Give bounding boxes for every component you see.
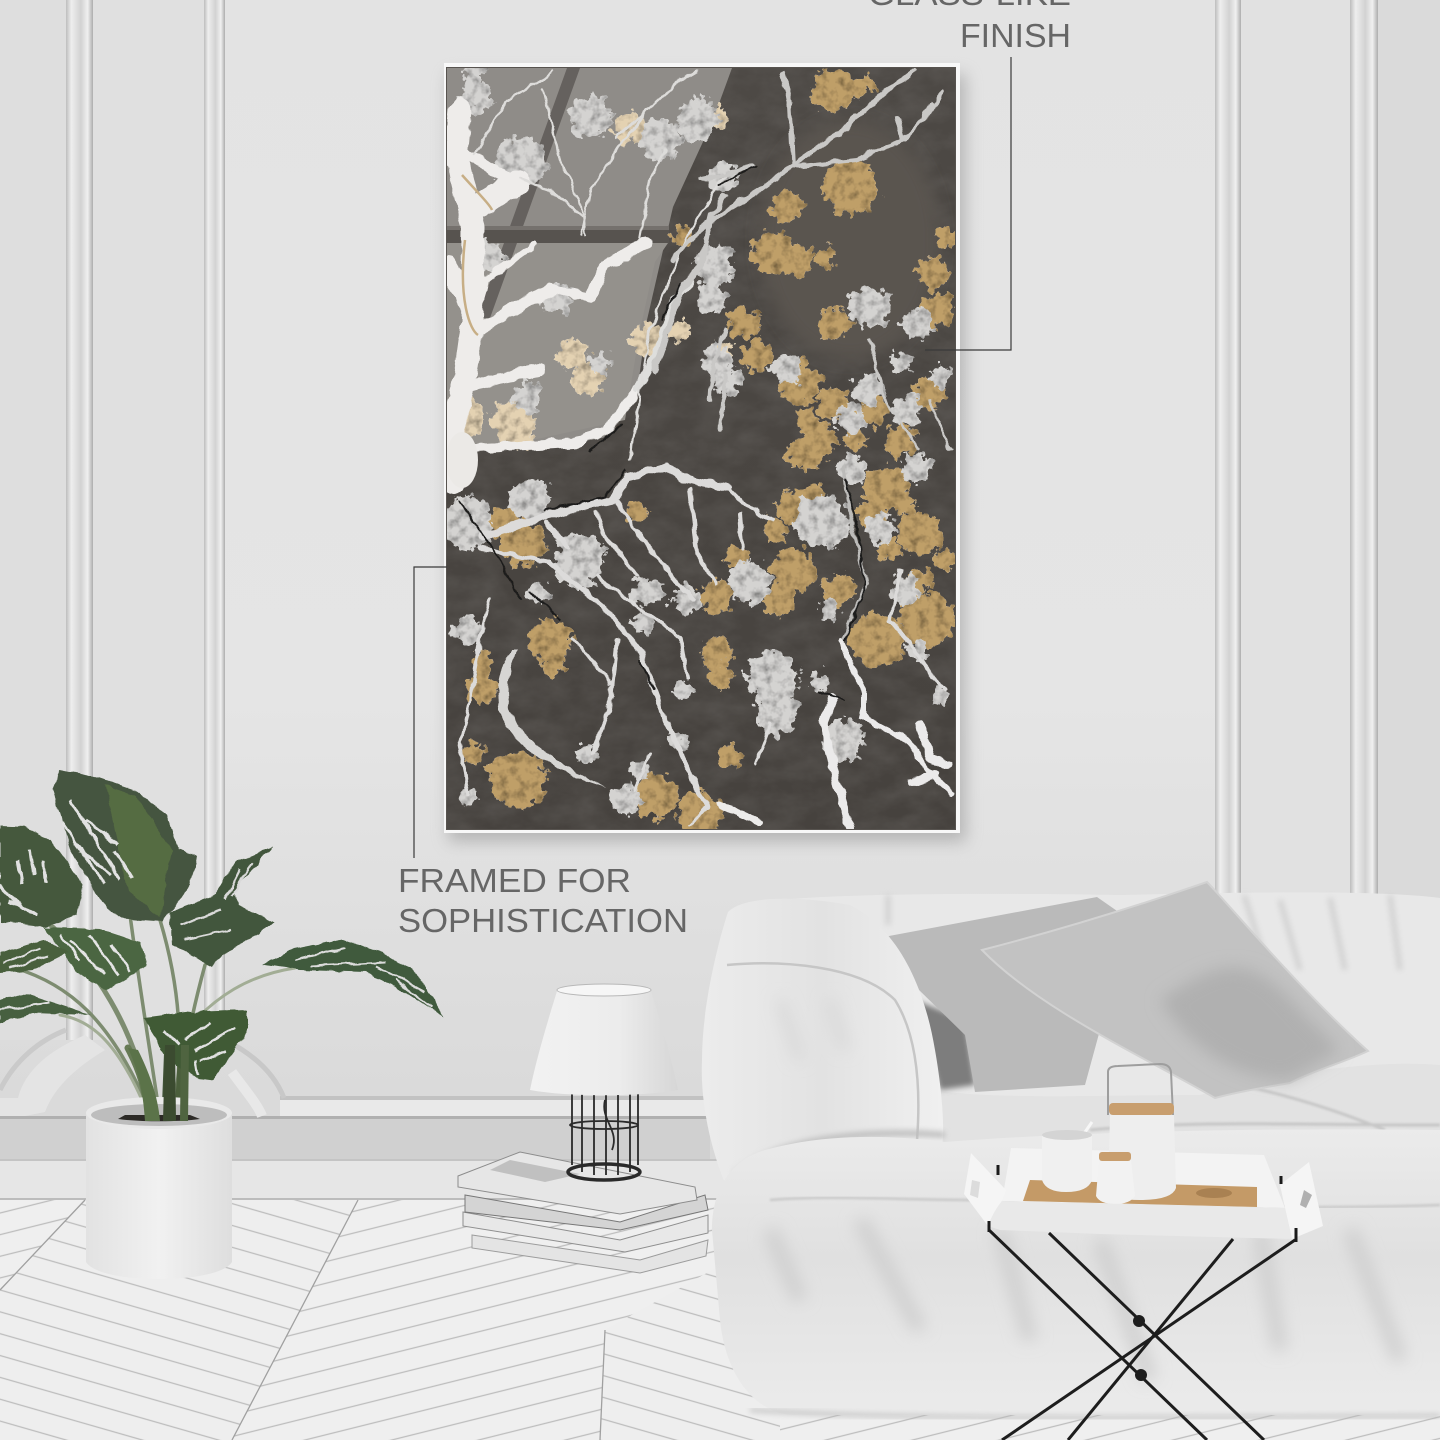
book: third <box>463 1212 708 1252</box>
herringbone floor <box>0 1200 1440 1440</box>
silver upper branches <box>655 70 950 450</box>
glass reflection <box>447 68 732 447</box>
thin pale upper twigs <box>475 70 725 460</box>
white trunk and thick branches <box>447 110 690 483</box>
silver blossoms <box>467 75 940 800</box>
tray front rim <box>988 1201 1292 1239</box>
pillow: rear grey <box>868 897 1130 1092</box>
tray table <box>964 1064 1323 1440</box>
tray left side <box>964 1153 1006 1226</box>
tray surface <box>1002 1148 1285 1208</box>
leaf: centre bottom <box>142 1010 247 1081</box>
leaf: large top <box>52 770 197 922</box>
sofa back cushions <box>780 892 1440 1110</box>
white frame <box>444 63 960 833</box>
pale blossoms <box>463 118 723 437</box>
arm to front shadow <box>735 1133 945 1175</box>
artwork <box>446 68 955 829</box>
table lamp <box>530 984 678 1180</box>
leaf: far left <box>0 826 83 927</box>
framed painting <box>444 63 966 842</box>
right white tree <box>823 640 952 827</box>
callout text: framed: FRAMED FOR <box>398 862 631 899</box>
fat curved lower branch <box>498 650 607 787</box>
pillow: front grey <box>982 882 1368 1098</box>
baseboard <box>0 1159 730 1200</box>
leaf: right upper <box>170 847 273 966</box>
leaf: long right <box>263 939 443 1017</box>
leader line: framed <box>414 567 447 858</box>
stack of books <box>458 1152 708 1273</box>
wooden board <box>1023 1180 1257 1207</box>
lamp cage base <box>568 1093 640 1180</box>
tray right side <box>1280 1162 1323 1239</box>
sofa arm <box>702 899 943 1190</box>
sofa front folds <box>770 1220 1400 1380</box>
planter pot <box>86 1045 232 1279</box>
callout text: glass-like finish <box>868 0 1071 54</box>
plant stems <box>15 915 295 1118</box>
painting drop shadow <box>448 74 966 842</box>
lamp shade <box>530 988 678 1095</box>
book: bottom <box>472 1235 708 1273</box>
shadow behind cushions <box>915 1000 975 1090</box>
dark cracks <box>460 165 865 700</box>
leaf: middle left <box>43 927 147 990</box>
callout: framed for sophistication <box>398 567 688 939</box>
callout text: glass-like finish: FINISH <box>960 17 1071 54</box>
sofa <box>702 882 1440 1418</box>
canvas <box>446 67 956 830</box>
book: top <box>458 1152 697 1214</box>
silver lower branches <box>460 467 945 825</box>
callout: glass-like finish <box>868 0 1071 350</box>
small ceramic jar <box>1096 1152 1135 1204</box>
leader line: glass-like finish <box>925 57 1011 350</box>
book: second <box>465 1195 708 1230</box>
callout text: framed <box>398 862 688 939</box>
leaf: left <box>0 939 67 973</box>
gold blossoms <box>473 85 948 813</box>
sofa front block <box>712 1129 1440 1415</box>
ceramic canister with handle <box>1108 1064 1176 1200</box>
branches <box>447 70 952 827</box>
potted monstera plant <box>0 770 443 1279</box>
monstera leaves <box>0 770 443 1081</box>
sofa seat cushions <box>930 1064 1440 1160</box>
leaf: lower left <box>0 993 90 1024</box>
table legs <box>989 1230 1295 1440</box>
ceramic cup <box>1042 1122 1092 1192</box>
callout text: framed: SOPHISTICATION <box>398 902 688 939</box>
tray handles <box>1300 1190 1312 1208</box>
